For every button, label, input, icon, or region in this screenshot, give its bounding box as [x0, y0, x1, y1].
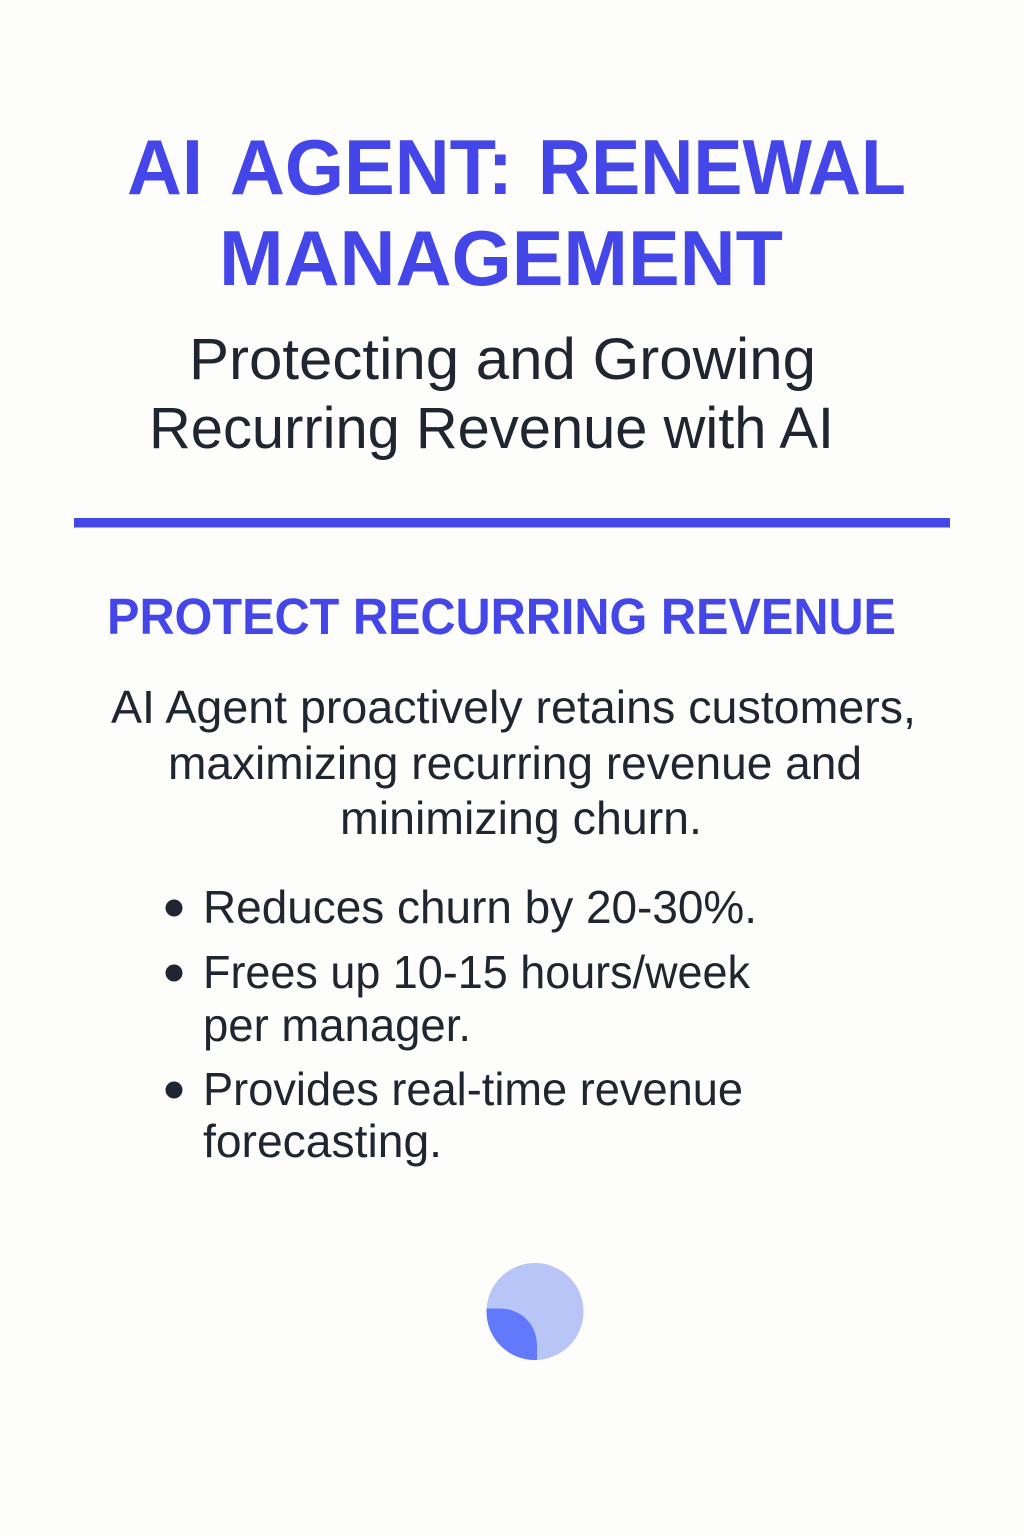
bullet: forecasting: Provides real-time revenue — [203, 1063, 743, 1115]
bullet: hours freed: Frees up 10-15 hours/week — [203, 946, 751, 998]
title: MANAGEMENT — [219, 214, 783, 302]
description paragraph: maximizing recurring revenue and — [168, 737, 862, 789]
title: RENEWAL — [538, 123, 906, 211]
description paragraph: AI Agent proactively retains customers, — [111, 681, 916, 733]
bullet: churn reduction: Reduces churn by 20-30%. — [203, 881, 757, 933]
bullet: hours freed: per manager. — [203, 999, 471, 1051]
bullet: hours freed — [166, 946, 751, 1051]
title: AI — [127, 123, 203, 211]
subtitle: Protecting and Growing — [189, 327, 816, 392]
description paragraph — [111, 681, 916, 844]
icon: quarter circle logo — [486, 1263, 584, 1360]
section heading: PROTECT RECURRING REVENUE — [107, 588, 896, 645]
subtitle: Recurring Revenue with AI — [149, 396, 834, 461]
bullet: forecasting — [166, 1063, 743, 1167]
title: AGENT: — [230, 123, 513, 211]
bullet list — [166, 881, 757, 1167]
description paragraph: minimizing churn. — [340, 792, 702, 844]
subtitle — [149, 327, 834, 461]
title — [127, 123, 906, 302]
bullet: forecasting: forecasting. — [203, 1115, 442, 1167]
divider — [74, 518, 950, 528]
